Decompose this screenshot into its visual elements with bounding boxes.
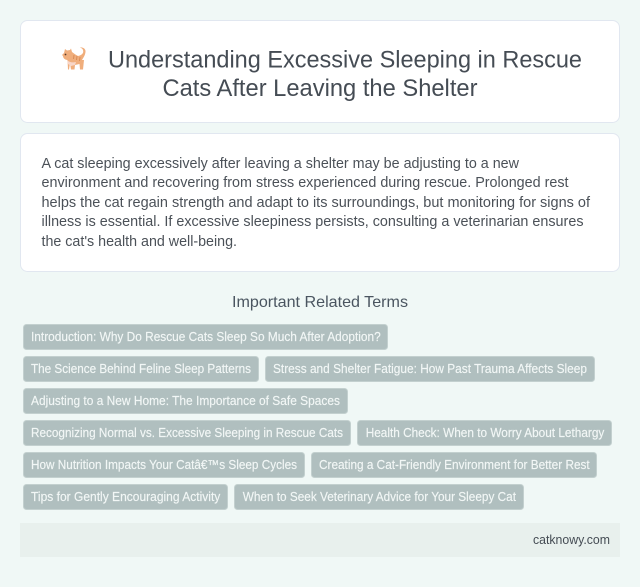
chip: nutrition xyxy=(24,452,304,478)
chip: adjusting xyxy=(24,388,348,414)
text block: description: illness is essential. If excessive sleepiness persists, consulting a veterinarian ensures xyxy=(42,214,584,230)
chip: recognizing xyxy=(24,420,350,446)
chip: veterinary advice xyxy=(234,484,524,510)
panel: description card xyxy=(20,134,620,272)
title: Cats After Leaving the Shelter xyxy=(162,75,478,102)
text block: description: helps the cat regain strength and adapt to its surroundings, but monitoring for signs of xyxy=(42,195,591,211)
chip: science xyxy=(24,356,258,382)
chip list: related terms xyxy=(24,324,612,510)
text block: description: environment and recovering from stress experienced during rescue. Prolonged rest xyxy=(42,175,568,191)
heading: important related terms: Important Related Terms xyxy=(232,294,408,311)
title xyxy=(108,46,582,102)
chip: introduction xyxy=(24,324,388,350)
chip: health check xyxy=(358,420,612,446)
chip: environment xyxy=(312,452,596,478)
chip: adjusting: Adjusting to a New Home: The Importance of Safe Spaces xyxy=(31,394,340,408)
text block: description: the cat's health and well-being. xyxy=(42,234,237,250)
chip: stress: Stress and Shelter Fatigue: How Past Trauma Affects Sleep xyxy=(273,362,587,376)
footer text: site name: catknowy.com xyxy=(533,532,610,547)
chip: veterinary advice: When to Seek Veterinary Advice for Your Sleepy Cat xyxy=(243,490,516,504)
title: Understanding Excessive Sleeping in Rescue xyxy=(108,46,582,74)
icon: orange cat xyxy=(62,47,86,70)
chip: stress xyxy=(266,356,594,382)
chip: nutrition: How Nutrition Impacts Your Catâ€™s Sleep Cycles xyxy=(31,458,297,472)
footer bar xyxy=(20,523,620,557)
chip: health check: Health Check: When to Worry About Lethargy xyxy=(366,426,605,440)
text block: description: A cat sleeping excessively after leaving a shelter may be adjusting to a new xyxy=(42,156,520,172)
chip: tips xyxy=(24,484,228,510)
panel: header card xyxy=(20,20,620,122)
chip: recognizing: Recognizing Normal vs. Excessive Sleeping in Rescue Cats xyxy=(31,426,343,440)
chip: introduction: Introduction: Why Do Rescue Cats Sleep So Much After Adoption? xyxy=(31,330,381,344)
text block: description xyxy=(42,156,591,250)
chip: tips: Tips for Gently Encouraging Activity xyxy=(31,490,221,504)
chip: science: The Science Behind Feline Sleep Patterns xyxy=(31,362,251,376)
chip: environment: Creating a Cat-Friendly Environment for Better Rest xyxy=(319,458,590,472)
